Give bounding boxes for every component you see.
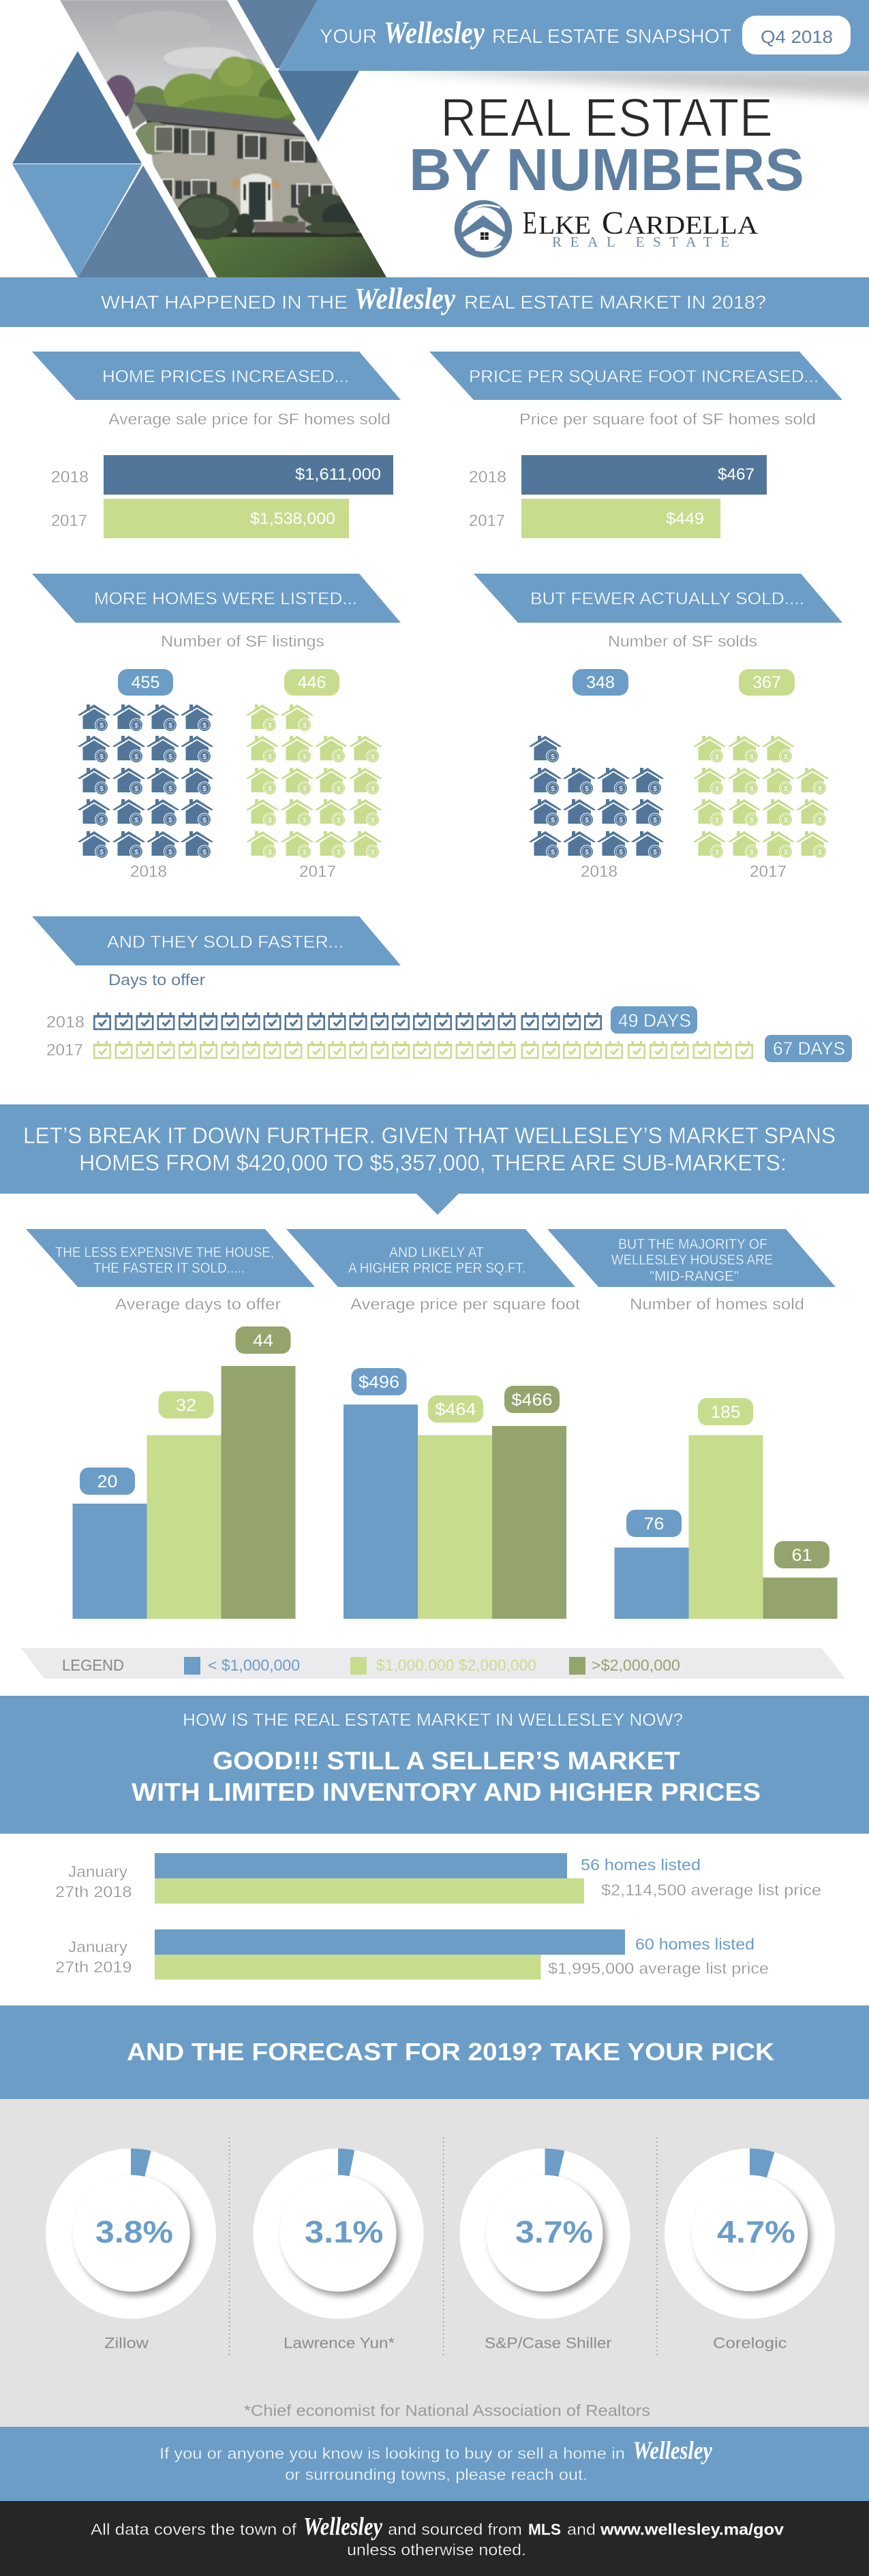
- subtitle: Price per square foot of SF homes sold: [519, 410, 816, 428]
- title: REAL ESTATE: [440, 87, 773, 148]
- banner: [26, 1229, 315, 1287]
- snapshot heading: [320, 16, 731, 50]
- windows lower: [162, 179, 174, 198]
- banner: [547, 1229, 836, 1287]
- bar chart: $464: [435, 1400, 476, 1419]
- steps: [254, 221, 305, 235]
- section heading: what happened: REAL ESTATE MARKET IN 2018?: [464, 292, 766, 313]
- quarter pill: Q4 2018: [761, 27, 833, 47]
- bar chart: [72, 1326, 296, 1619]
- year labels: 2018: [46, 1013, 85, 1031]
- banner: AND LIKELY AT: [389, 1245, 484, 1260]
- bar chart: 76: [643, 1515, 664, 1534]
- call to action: If you or anyone you know is looking to buy or sell a home in: [159, 2445, 625, 2462]
- bar chart: [344, 1368, 566, 1619]
- subtitle: Average price per square foot: [350, 1295, 581, 1313]
- calendar row 2018: [93, 1012, 602, 1029]
- row 2019: January: [68, 1938, 128, 1955]
- subtitle: Number of SF listings: [161, 632, 324, 650]
- pictogram 2017: [693, 736, 829, 858]
- donut: Corelogic: [665, 2149, 835, 2352]
- panel: number of homes sold: [547, 1229, 837, 1619]
- bar chart: 2017: [51, 512, 87, 530]
- panel: days to offer: [32, 916, 852, 1062]
- pill 67 days: 67 DAYS: [773, 1038, 845, 1059]
- banner: WELLESLEY HOUSES ARE: [611, 1252, 773, 1268]
- title: BY NUMBERS: [409, 137, 804, 203]
- footnote: *Chief economist for National Association of Realtors: [244, 2402, 650, 2419]
- bar chart: 32: [176, 1396, 196, 1415]
- logo wordmark: REAL ESTATE: [552, 234, 729, 250]
- panel: january comparison: [55, 1853, 821, 1980]
- row 2018: 56 homes listed: [581, 1856, 701, 1874]
- footer: MLS: [528, 2521, 561, 2539]
- header shadow: [359, 68, 869, 99]
- pill 455: 455: [132, 673, 159, 692]
- snapshot heading: REAL ESTATE SNAPSHOT: [492, 26, 731, 48]
- panel: home prices: [32, 352, 401, 538]
- donut: Zillow: [46, 2148, 216, 2352]
- windows upper: [155, 126, 174, 152]
- donut: Corelogic: Corelogic: [713, 2334, 787, 2352]
- donut: Lawrence Yun: Lawrence Yun*: [284, 2334, 395, 2352]
- year labels: [581, 863, 787, 881]
- pill 446: [284, 669, 339, 696]
- pictogram 2018: [529, 736, 664, 858]
- section heading: forecast: AND THE FORECAST FOR 2019? TAKE YOUR PICK: [127, 2038, 774, 2066]
- quarter pill: [742, 16, 851, 55]
- logo: [458, 204, 759, 254]
- header panel: [12, 0, 869, 283]
- bar chart: $1,538,000: [250, 510, 335, 528]
- donut: Zillow: Zillow: [104, 2334, 149, 2352]
- bar chart: $1,611,000: [295, 465, 381, 484]
- donut: S&P/Case Shiller: [459, 2149, 630, 2352]
- logo wordmark: [523, 205, 759, 250]
- subtitle: Days to offer: [108, 971, 205, 989]
- section heading: market now: GOOD!!! STILL A SELLER’S MARKET: [213, 1747, 680, 1775]
- legend: $1,000,000 $2,000,000: [376, 1656, 536, 1674]
- year labels: 2017: [46, 1041, 83, 1059]
- call to action: Wellesley: [632, 2437, 712, 2465]
- banner: [429, 352, 842, 400]
- bar chart: 185: [710, 1403, 740, 1422]
- pill 367: [739, 669, 795, 696]
- year labels: 2018: [581, 863, 618, 881]
- title: [409, 87, 804, 203]
- bushes: [176, 193, 240, 240]
- pill 348: 348: [586, 673, 615, 692]
- row 2018: January: [68, 1863, 128, 1880]
- bar chart: 2018: [469, 468, 506, 486]
- house photo: [55, 0, 409, 283]
- section heading: forecast: [0, 2006, 869, 2099]
- pill 446: 446: [298, 673, 326, 692]
- subtitle: Number of homes sold: [630, 1295, 804, 1313]
- donut: S&P/Case Shiller: 3.7%: [515, 2214, 593, 2250]
- banner: THE FASTER IT SOLD.....: [93, 1260, 245, 1276]
- logo mark: [458, 204, 508, 254]
- row 2019: $1,995,000 average list price: [548, 1959, 769, 1977]
- logo wordmark: ARDELLA: [625, 211, 759, 240]
- banner: BUT FEWER ACTUALLY SOLD....: [530, 589, 804, 608]
- footer: Wellesley: [303, 2513, 382, 2541]
- bar chart: [51, 455, 393, 538]
- pictogram 2018: [78, 704, 213, 858]
- section heading: sub-markets: LET’S BREAK IT DOWN FURTHER. GIVEN THAT WELLESLEY’S MARKET SPANS: [23, 1123, 836, 1148]
- pill 67 days: [765, 1035, 852, 1062]
- year labels: [130, 863, 336, 881]
- footer: www.wellesley.ma/gov: [600, 2521, 784, 2539]
- trees: [106, 74, 136, 117]
- banner: [474, 574, 842, 623]
- banner: "MID-RANGE": [650, 1269, 739, 1284]
- wall: [147, 123, 361, 233]
- bar chart: $467: [718, 465, 754, 484]
- donut: Lawrence Yun: [254, 2149, 424, 2352]
- year labels: [46, 1013, 85, 1059]
- legend: < $1,000,000: [208, 1656, 300, 1674]
- row 2018: [55, 1853, 821, 1904]
- pill 348: [573, 669, 628, 696]
- donut: Zillow: 3.8%: [95, 2214, 173, 2250]
- footer: and: [567, 2521, 596, 2539]
- roof: [134, 102, 305, 135]
- banner: MORE HOMES WERE LISTED...: [94, 589, 357, 608]
- banner: PRICE PER SQUARE FOOT INCREASED...: [469, 367, 819, 386]
- subtitle: Number of SF solds: [608, 632, 757, 650]
- bar chart: $449: [666, 510, 704, 528]
- pill 49 days: [611, 1006, 697, 1034]
- pill 367: 367: [752, 673, 781, 692]
- bar chart: 2018: [51, 468, 89, 486]
- subtitle: Average sale price for SF homes sold: [108, 410, 391, 428]
- banner: [32, 916, 401, 965]
- section heading: market now: HOW IS THE REAL ESTATE MARKET IN WELLESLEY NOW?: [183, 1709, 683, 1730]
- top banner: [278, 0, 869, 71]
- panel: average days to offer: [26, 1229, 315, 1619]
- year labels: 2018: [130, 863, 167, 881]
- legend: [21, 1648, 845, 1679]
- donut: Lawrence Yun: 3.1%: [305, 2214, 383, 2250]
- legend: >$2,000,000: [592, 1656, 680, 1674]
- logo wordmark: E: [523, 205, 537, 241]
- section heading: sub-markets: HOMES FROM $420,000 TO $5,357,000, THERE ARE SUB-MARKETS:: [79, 1150, 787, 1175]
- snapshot heading: Wellesley: [384, 16, 485, 50]
- banner: A HIGHER PRICE PER SQ.FT.: [348, 1260, 525, 1276]
- row 2018: 27th 2018: [55, 1883, 132, 1901]
- logo wordmark: LKE: [538, 211, 591, 240]
- panel: price per square foot: [429, 352, 842, 538]
- panel: average price per square foot: [286, 1229, 581, 1619]
- call to action: [0, 2427, 869, 2501]
- calendar row 2017: [93, 1041, 753, 1058]
- donut: S&P/Case Shiller: S&P/Case Shiller: [485, 2334, 612, 2352]
- bar chart: 20: [97, 1472, 117, 1491]
- call to action: or surrounding towns, please reach out.: [285, 2466, 588, 2483]
- row 2019: [55, 1929, 769, 1980]
- footer: [0, 2501, 869, 2576]
- banner: [32, 574, 401, 623]
- section heading: what happened: [0, 277, 869, 327]
- pill 49 days: 49 DAYS: [618, 1010, 691, 1031]
- bar chart: [469, 455, 767, 538]
- donut: Corelogic: 4.7%: [717, 2214, 795, 2250]
- legend: LEGEND: [62, 1656, 124, 1674]
- snapshot heading: YOUR: [320, 26, 377, 48]
- lawn: [194, 236, 386, 277]
- logo wordmark: C: [602, 205, 624, 241]
- year labels: 2017: [750, 863, 787, 881]
- banner: [286, 1229, 575, 1287]
- panel: homes sold: [474, 574, 842, 881]
- banner: THE LESS EXPENSIVE THE HOUSE,: [55, 1245, 274, 1260]
- section heading: market now: WITH LIMITED INVENTORY AND HIGHER PRICES: [132, 1778, 761, 1806]
- section heading: what happened: WHAT HAPPENED IN THE: [101, 292, 348, 313]
- bar chart: 2017: [469, 512, 505, 530]
- bar chart: $466: [511, 1391, 552, 1410]
- panel: forecasts: [0, 2099, 869, 2427]
- bar chart: [615, 1398, 837, 1619]
- door: [241, 174, 273, 221]
- left foliage: [135, 121, 166, 155]
- row 2019: 60 homes listed: [635, 1935, 754, 1953]
- pictogram 2017: [246, 704, 382, 858]
- banner: BUT THE MAJORITY OF: [618, 1237, 767, 1252]
- row 2019: 27th 2019: [55, 1958, 132, 1976]
- banner: HOME PRICES INCREASED...: [102, 367, 349, 386]
- row 2018: $2,114,500 average list price: [601, 1881, 821, 1899]
- panel: homes listed: [32, 574, 401, 881]
- bar chart: 44: [253, 1331, 273, 1350]
- geometric triangles: [12, 0, 359, 277]
- banner: [32, 352, 401, 400]
- section heading: what happened: Wellesley: [354, 282, 455, 315]
- banner: AND THEY SOLD FASTER...: [107, 933, 344, 952]
- section heading: sub-markets: [0, 1104, 869, 1215]
- footer: and sourced from: [388, 2521, 522, 2539]
- subtitle: Average days to offer: [115, 1295, 281, 1313]
- year labels: 2017: [299, 863, 336, 881]
- bar chart: $496: [359, 1373, 399, 1392]
- section heading: market now: [0, 1696, 869, 1834]
- footer: All data covers the town of: [91, 2521, 297, 2539]
- footer: unless otherwise noted.: [347, 2541, 526, 2559]
- bar chart: 61: [792, 1546, 812, 1565]
- pill 455: [118, 669, 173, 696]
